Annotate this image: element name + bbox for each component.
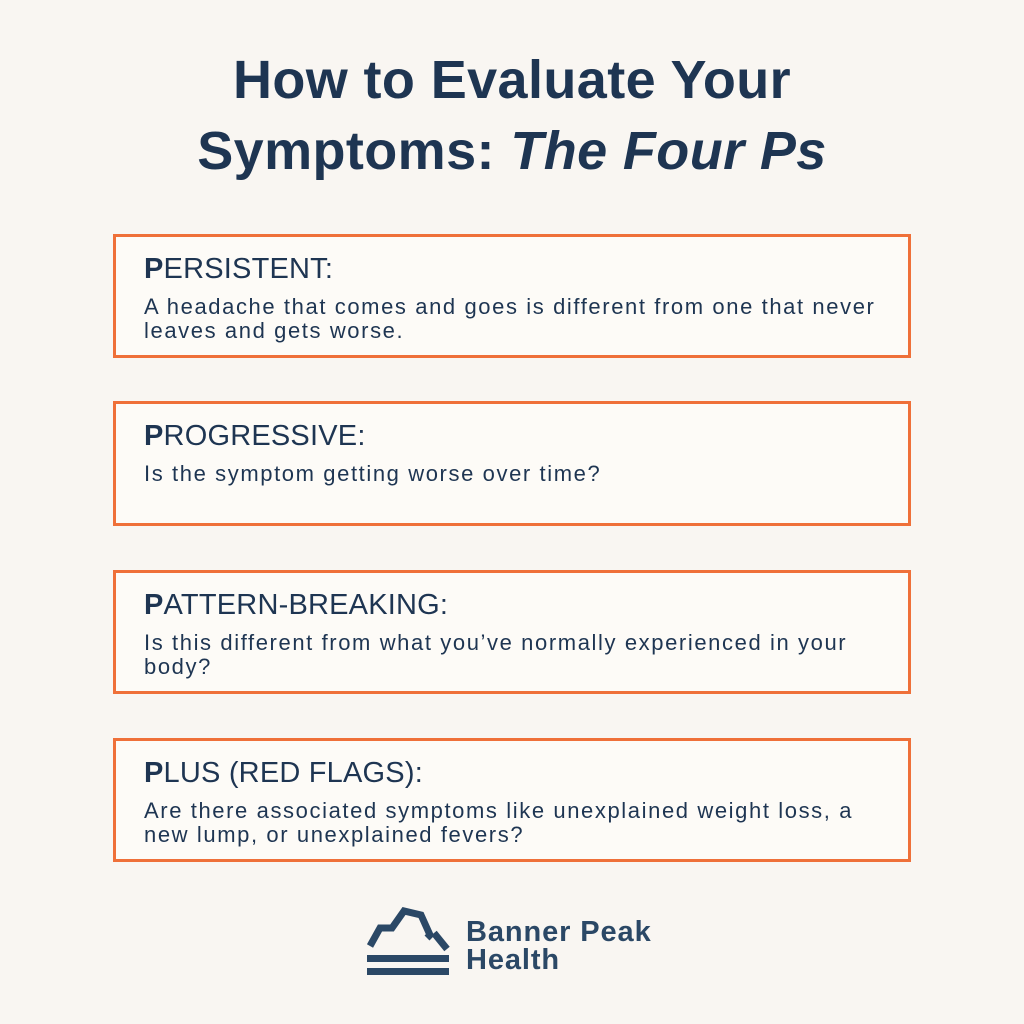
text: plus (144, 798, 853, 847)
text: persistent: leaves and gets worse. (144, 318, 404, 343)
logo text (466, 916, 652, 976)
heading: progressive: PROGRESSIVE: (144, 420, 366, 452)
panel: progressive (113, 401, 911, 526)
text: pattern-breaking: body? (144, 654, 212, 679)
text: plus: new lump, or unexplained fevers? (144, 822, 524, 847)
text: persistent (144, 294, 875, 343)
title: How to Evaluate Your (233, 50, 791, 110)
heading: persistent: PERSISTENT: (144, 253, 333, 285)
text: progressive: Is the symptom getting worse over time? (144, 461, 601, 486)
text: pattern-breaking (144, 630, 847, 679)
title: Symptoms: The Four Ps (197, 121, 827, 181)
heading: plus: PLUS (RED FLAGS): (144, 757, 423, 789)
heading: pattern-breaking: PATTERN-BREAKING: (144, 589, 448, 621)
text: persistent: A headache that comes and goes is different from one that never (144, 294, 875, 319)
icon: mountain (367, 907, 450, 975)
logo text: Banner Peak (466, 916, 652, 948)
logo (367, 907, 652, 976)
panel: plus red flags (113, 738, 911, 862)
panel: pattern-breaking (113, 570, 911, 694)
title (197, 50, 827, 181)
text: pattern-breaking: Is this different from what you’ve normally experienced in your (144, 630, 847, 655)
panel: persistent (113, 234, 911, 358)
text: plus: Are there associated symptoms like unexplained weight loss, a (144, 798, 853, 823)
logo text: Health (466, 944, 560, 976)
